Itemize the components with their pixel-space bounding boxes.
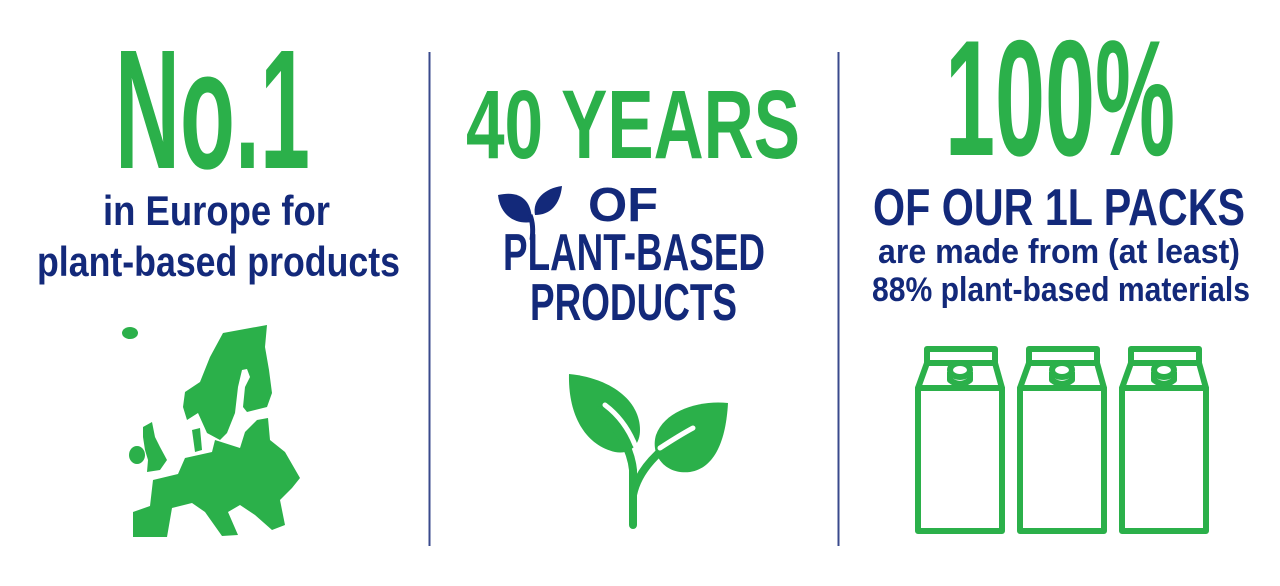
panel: 100% packs bbox=[872, 6, 1250, 531]
panel: 40 years bbox=[466, 70, 800, 525]
text: OF PLANT-BASED PRODUCTS bbox=[503, 179, 765, 332]
text: OF PLANT-BASED PRODUCTS: OF bbox=[588, 179, 658, 232]
icon: three cartons bbox=[918, 349, 1206, 531]
text: made from plant-based materials: are made from (at least) bbox=[878, 233, 1240, 271]
heading: No.1: No.1 bbox=[115, 15, 310, 205]
text: OF PLANT-BASED PRODUCTS: PLANT-BASED bbox=[503, 224, 765, 282]
icon: small navy sprout bbox=[498, 186, 562, 240]
text: made from plant-based materials bbox=[872, 233, 1250, 309]
text: in Europe for plant-based products: plant-based products bbox=[37, 238, 400, 285]
heading: 40 YEARS: 40 YEARS bbox=[466, 70, 800, 179]
icon: green sprout bbox=[569, 374, 728, 525]
text: OF PLANT-BASED PRODUCTS: PRODUCTS bbox=[530, 274, 737, 332]
panel: No.1 in Europe bbox=[37, 15, 400, 537]
text: in Europe for plant-based products: in Europe for bbox=[103, 187, 330, 234]
icon: map of Europe bbox=[122, 325, 300, 537]
text: in Europe for plant-based products bbox=[37, 187, 400, 285]
